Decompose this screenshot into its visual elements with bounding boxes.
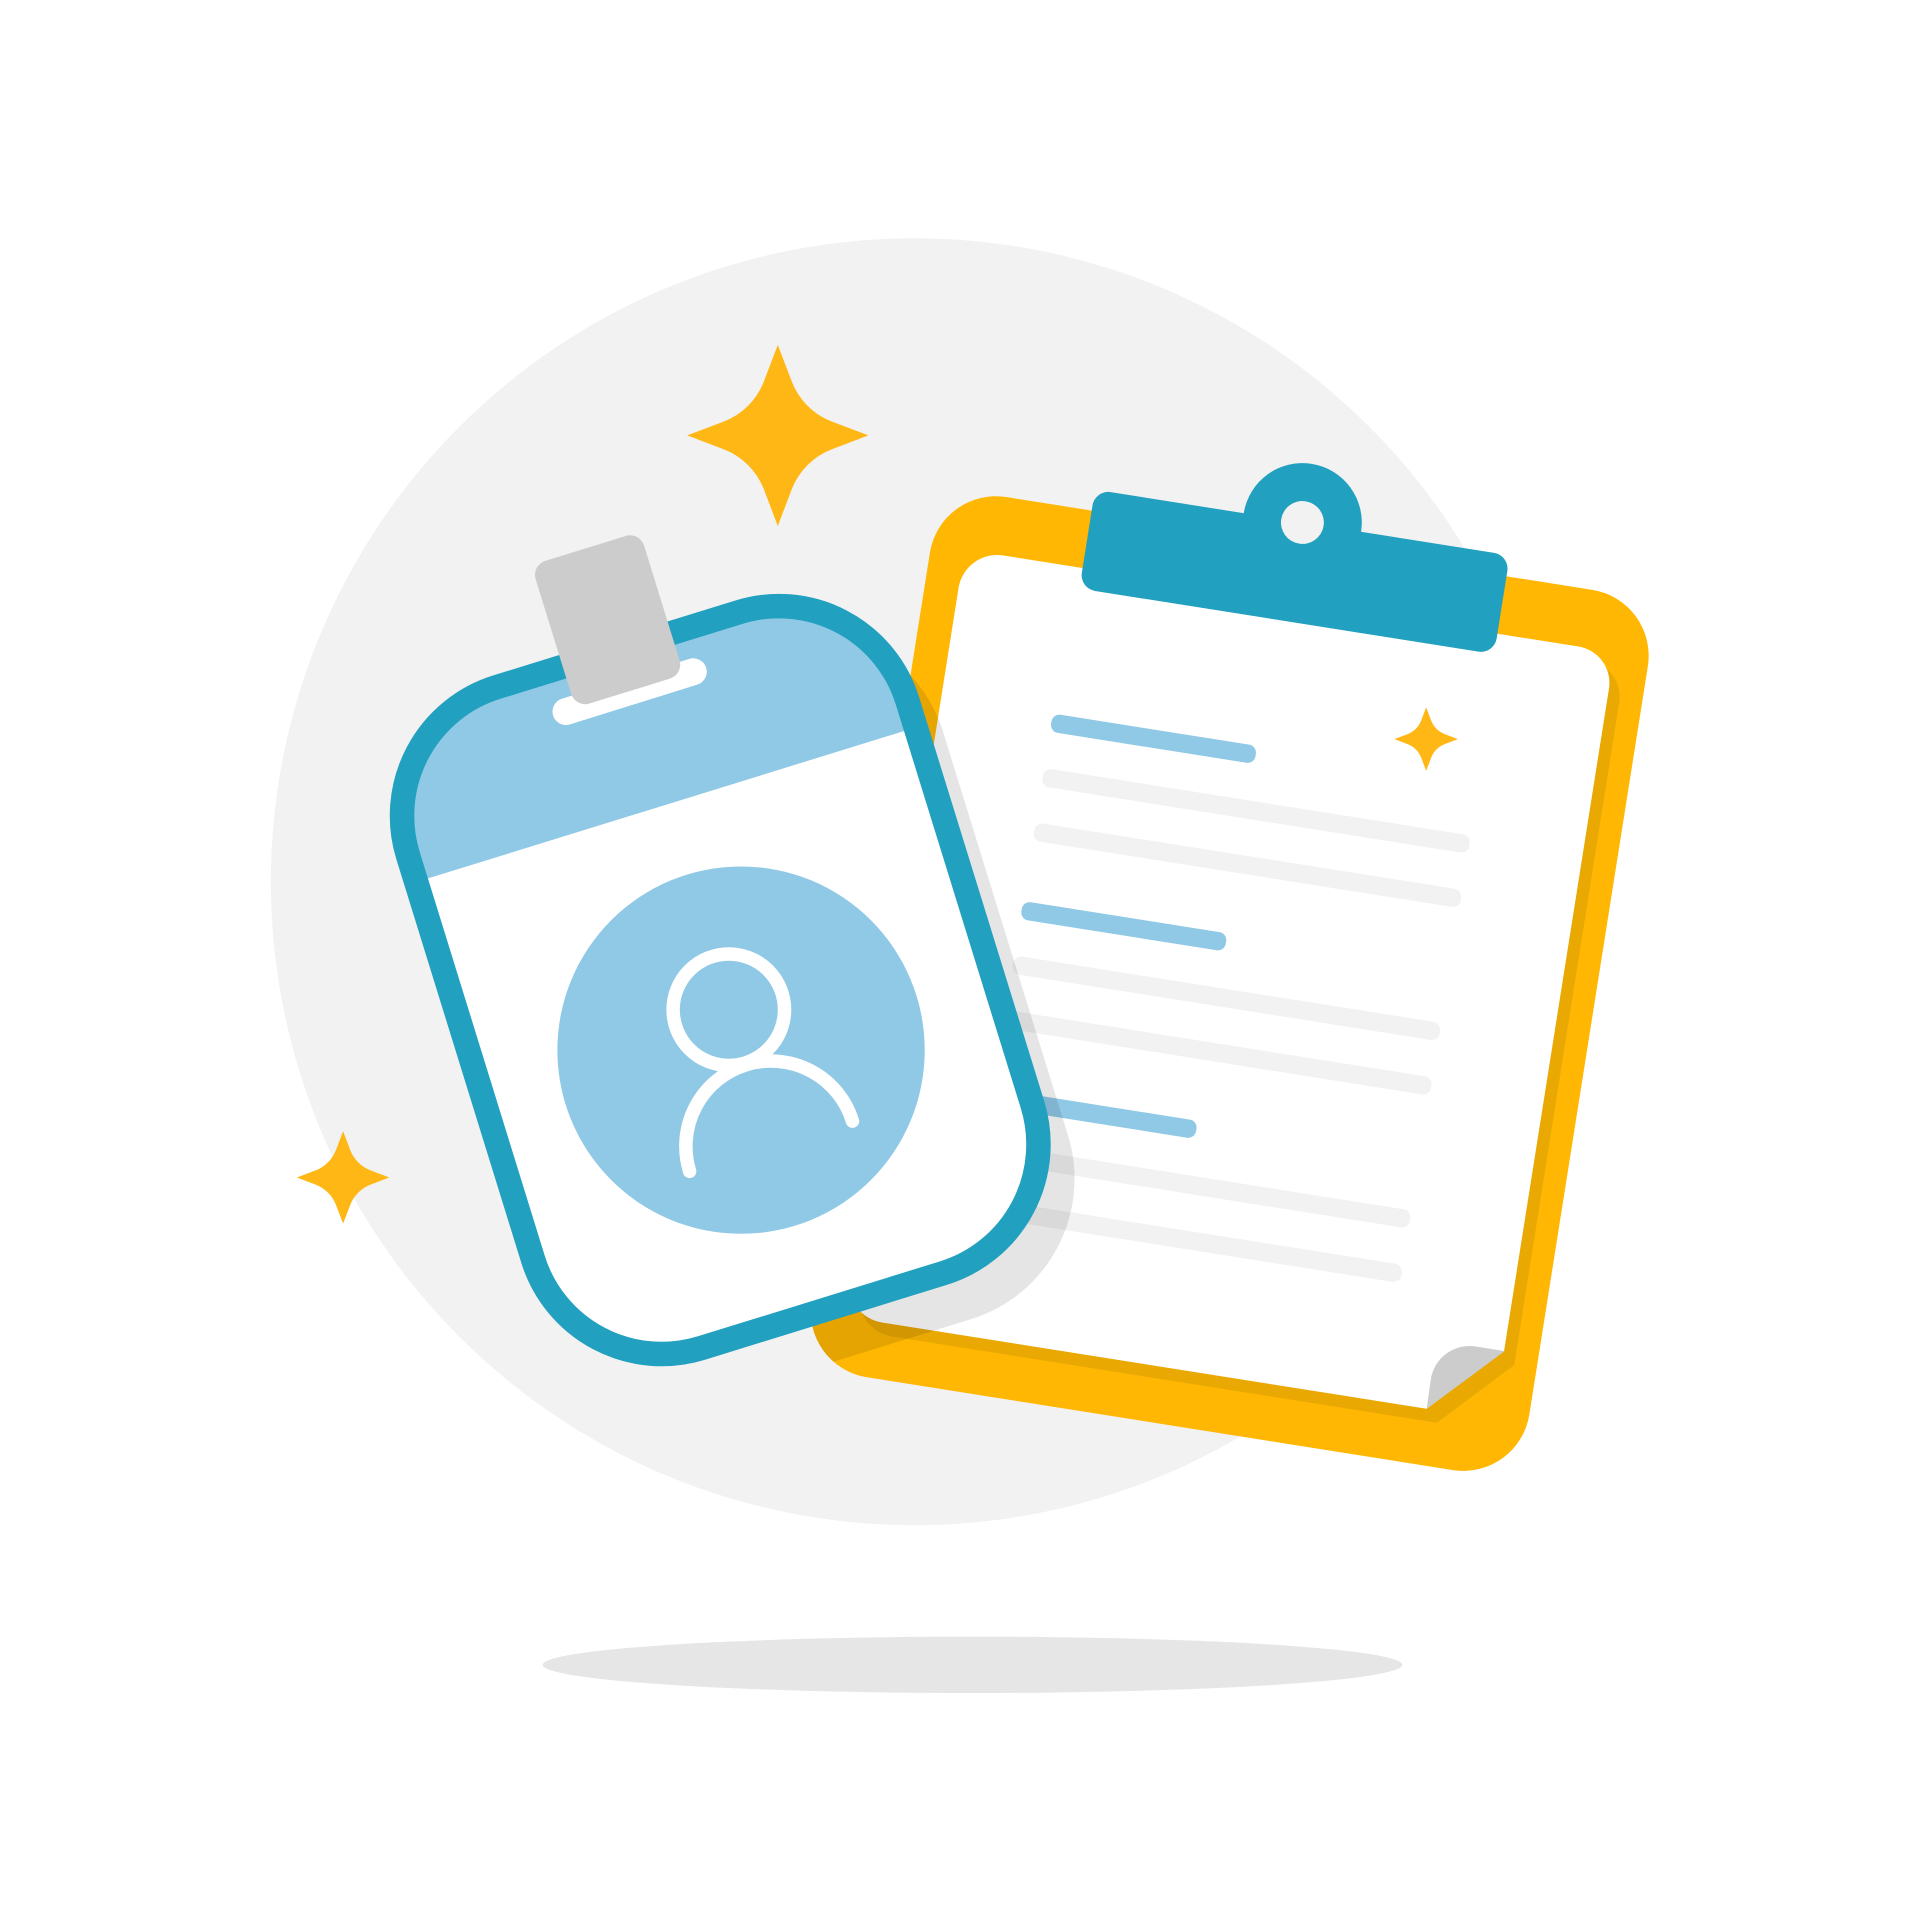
clipboard board <box>801 487 1658 1481</box>
ground shadow <box>543 1637 1402 1693</box>
list lines <box>973 714 1480 1283</box>
badge body <box>368 572 1072 1388</box>
badge clip tab <box>531 532 684 708</box>
avatar circle <box>557 866 925 1234</box>
scene <box>271 238 1671 1693</box>
badge slot <box>566 672 693 712</box>
clip bar <box>1079 431 1519 654</box>
icon: small left sparkle <box>297 1131 389 1224</box>
badge header band <box>414 618 904 878</box>
background circle <box>271 238 1558 1525</box>
paper shadow <box>853 563 1625 1433</box>
illustration <box>271 238 1649 1693</box>
icon: sparkle on paper <box>1394 707 1458 771</box>
badge outline <box>368 572 1072 1388</box>
paper folded corner <box>1426 1340 1505 1419</box>
clipboard <box>801 407 1671 1481</box>
icon: person <box>673 954 852 1171</box>
badge drop shadow <box>812 676 1074 1362</box>
id badge <box>368 532 1072 1388</box>
paper sheet <box>843 549 1615 1419</box>
icon: large sparkle <box>687 345 868 526</box>
